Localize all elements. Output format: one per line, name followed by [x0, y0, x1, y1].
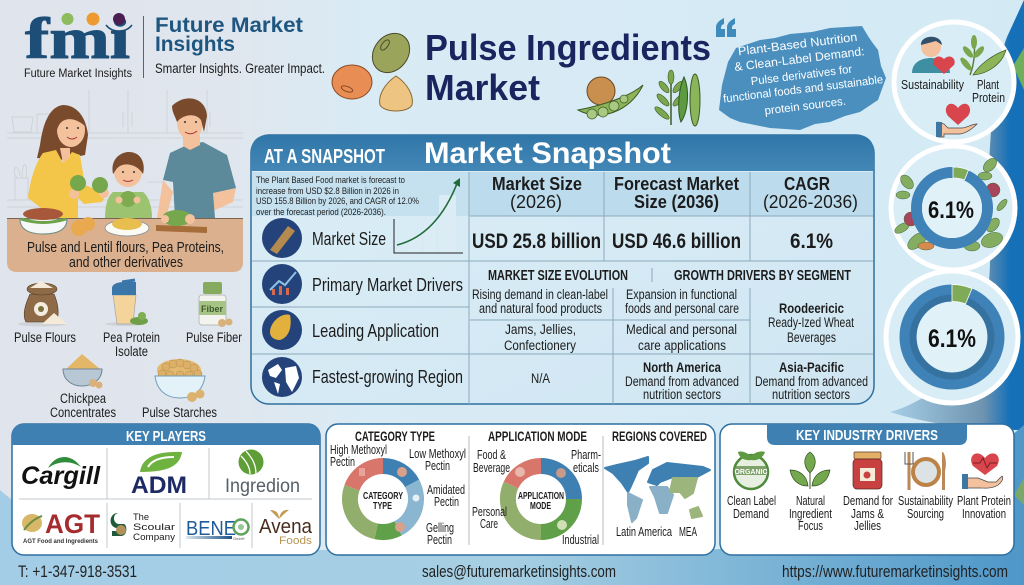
panel heading: KEY PLAYERS — [126, 429, 206, 445]
panel: key industry drivers — [720, 424, 1014, 555]
driver: sustainability sourcing — [898, 452, 953, 521]
circle: 6.1% donut with vegetables: 6.1% — [928, 197, 974, 224]
logo: Ingredion — [225, 450, 300, 497]
heading: application mode: APPLICATION MODE — [488, 429, 587, 444]
donut center: application mode: MODE — [530, 500, 551, 512]
logo: ADM: ADM — [131, 472, 187, 499]
illustration: family in kitchen: and other derivatives — [69, 255, 183, 271]
table cells: North America — [643, 360, 721, 375]
donut center: application mode — [518, 490, 564, 512]
panel heading: KEY INDUSTRY DRIVERS — [796, 428, 938, 444]
callout: plant-based nutrition: Plant-Based Nutrition — [737, 30, 858, 58]
column headings: Size (2036) — [634, 192, 719, 212]
icon: pod and plant — [578, 70, 700, 126]
summary text: over the forecast period (2026-2036). — [256, 207, 386, 217]
circle: 6.1% donut: 6.1% — [928, 325, 976, 353]
logo: The Scoular Company — [111, 512, 175, 542]
circle: sustainability and plant protein: Plant — [977, 78, 999, 92]
logo: Avena Foods: Foods — [279, 535, 313, 547]
category labels: Gelling — [426, 521, 454, 535]
application labels: eticals — [573, 461, 599, 475]
callout: plant-based nutrition — [717, 26, 886, 130]
category labels: Low Methoxyl — [409, 447, 466, 461]
driver: plant protein innovation: Innovation — [962, 506, 1006, 521]
heading: category type: CATEGORY TYPE — [355, 429, 435, 444]
table cells: Confectionery — [504, 338, 576, 353]
growth chart — [394, 178, 463, 253]
driver: clean label demand: Clean Label — [727, 493, 776, 508]
logo: Cargill: Cargill — [21, 462, 101, 490]
sub heading: growth drivers: GROWTH DRIVERS BY SEGMENT — [674, 268, 851, 284]
ingredient: pulse fiber: Pulse Fiber — [186, 330, 242, 345]
row icon: drivers — [262, 264, 302, 304]
title: Pulse Ingredients — [425, 27, 711, 68]
driver: natural ingredient focus: Natural — [796, 493, 825, 508]
sub heading: market size evolution: MARKET SIZE EVOLUTION — [488, 268, 628, 284]
panel header: Market Snapshot — [424, 137, 671, 170]
logo: BENEO: GmbH — [233, 536, 245, 541]
donut center: category type: TYPE — [373, 500, 392, 512]
market size value: USD 25.8 billion — [472, 229, 601, 253]
title: Market — [425, 67, 540, 108]
table cells: care applications — [638, 338, 726, 353]
table — [7, 218, 243, 272]
driver: demand for jams and jellies: Demand for — [843, 493, 893, 508]
application labels: Beverage — [473, 461, 510, 475]
logo: Avena Foods — [259, 510, 313, 547]
ingredient: pulse fiber: Fiber — [201, 304, 223, 314]
column headings: Forecast Market — [614, 174, 739, 194]
title — [425, 27, 711, 108]
logo: Future Market Insights: Future Market — [155, 13, 303, 37]
category labels: High Methoxyl — [330, 443, 387, 457]
table cells: Expansion in functional — [626, 287, 737, 302]
ingredient: pea protein isolate — [103, 280, 160, 359]
logo: BENEO: BENE — [186, 518, 236, 540]
illustration: family in kitchen — [7, 90, 243, 272]
food on table — [20, 208, 207, 236]
driver: natural ingredient focus: Ingredient — [789, 506, 832, 521]
table cells: nutrition sectors — [772, 387, 850, 402]
category labels: Amidated — [427, 483, 465, 497]
footer contacts: T: +1-347-918-3531 — [18, 562, 137, 581]
logo: Future Market Insights — [24, 6, 325, 80]
panel: key players — [12, 424, 320, 555]
row label: market size: Market Size — [312, 228, 386, 249]
application labels: Food & — [477, 448, 506, 462]
icon: whole beans — [332, 26, 417, 111]
table cells: and natural food products — [479, 301, 602, 316]
table cells: N/A — [531, 371, 550, 386]
callout: plant-based nutrition: protein sources. — [764, 96, 847, 118]
logo: The Scoular Company: Scoular — [133, 522, 175, 532]
driver: natural ingredient focus: Focus — [798, 518, 823, 533]
category labels — [330, 443, 466, 547]
row label: drivers: Primary Market Drivers — [312, 274, 463, 295]
ingredient: pulse flours: Pulse Flours — [14, 330, 76, 345]
table cells: Demand from advanced — [755, 374, 868, 389]
driver: sustainability sourcing: Sourcing — [907, 506, 944, 521]
circle: sustainability and plant protein: Protein — [972, 91, 1005, 105]
donut: category type — [350, 466, 420, 532]
logo: AGT: AGT Food and Ingredients — [23, 539, 99, 545]
table cells: Roodeericic — [779, 301, 844, 316]
driver: sustainability sourcing: Sustainability — [898, 493, 953, 508]
logo: Avena Foods: Avena — [259, 516, 313, 538]
panel header — [251, 135, 874, 171]
table cells: Demand from advanced — [625, 374, 739, 389]
circle: sustainability and plant protein: Sustainability — [901, 78, 965, 92]
table cells: Medical and personal — [626, 322, 737, 337]
quote mark — [716, 18, 736, 37]
table cells: Rising demand in clean-label — [472, 287, 608, 302]
column headings: (2026-2036) — [763, 192, 858, 212]
category labels: Pectin — [427, 533, 452, 547]
panel header: AT A SNAPSHOT — [264, 146, 385, 168]
callout: plant-based nutrition: Pulse derivatives for — [750, 64, 853, 88]
application labels: Personal — [472, 505, 507, 519]
panel: categories — [326, 424, 715, 555]
logo: The Scoular Company: Company — [133, 532, 175, 542]
icon: wheat plant — [959, 35, 1006, 75]
driver: natural ingredient focus — [789, 452, 832, 533]
circle: 6.1% donut with vegetables — [891, 146, 1015, 270]
application labels: Pharm- — [571, 448, 601, 462]
column headings — [492, 174, 858, 212]
icon: heart in hand — [936, 104, 977, 137]
cagr value: 6.1% — [790, 229, 833, 253]
logo: AGT: AGT — [45, 509, 100, 539]
logo: Future Market Insights: Smarter Insights. Greater Impact. — [155, 61, 325, 76]
table cells: Ready-Ized Wheat — [768, 315, 854, 330]
row label: application: Leading Application — [312, 320, 439, 341]
circle: 6.1% donut — [886, 271, 1018, 403]
panel heading — [12, 424, 320, 445]
driver: demand for jams and jellies: Jams & — [851, 506, 884, 521]
heading: regions covered: REGIONS COVERED — [612, 429, 707, 444]
donut center: application mode: APPLICATION — [518, 490, 564, 502]
table cells: Jams, Jellies, — [505, 322, 576, 337]
category labels: Pectin — [330, 455, 355, 469]
caption: Pulse and Lentil flours, Pea Proteins, — [27, 240, 224, 256]
footer contacts — [18, 562, 1008, 581]
circle: sustainability and plant protein — [894, 22, 1014, 142]
donut center: category type — [363, 490, 403, 512]
callout: plant-based nutrition: functional foods and sustainable — [723, 74, 884, 106]
table cells: foods and personal care — [625, 301, 739, 316]
row icon: market size — [262, 218, 302, 258]
category labels: Pectin — [425, 459, 450, 473]
ingredient: pea protein isolate: Isolate — [115, 344, 148, 359]
ingredient: pulse flours — [14, 281, 76, 345]
donut: application mode — [508, 466, 574, 532]
column headings: (2026) — [510, 192, 562, 212]
ingredient: pea protein isolate: Pea Protein — [103, 330, 160, 345]
logo: The Scoular Company: The — [133, 512, 149, 522]
donut chart — [908, 284, 996, 381]
logo: Future Market Insights: Future Market Insights — [24, 68, 132, 80]
logo: Future Market Insights: Insights — [155, 32, 235, 56]
driver: clean label demand: ORGANIC — [734, 469, 768, 476]
footer contacts: sales@futuremarketinsights.com — [422, 562, 616, 581]
ingredient: pulse fiber — [186, 282, 242, 345]
category labels: Pectin — [434, 495, 459, 509]
panel: market snapshot — [251, 135, 874, 404]
world map — [605, 457, 710, 539]
vegetable wreath — [893, 156, 1009, 253]
application labels: Care — [480, 517, 498, 531]
donut center: category type: CATEGORY — [363, 490, 403, 502]
forecast value: USD 46.6 billion — [612, 229, 741, 253]
table cells: Asia-Pacific — [779, 360, 844, 375]
driver: clean label demand — [727, 451, 776, 521]
fmi monogram: fmi — [25, 6, 130, 71]
table cells: Beverages — [787, 330, 836, 345]
row label: region: Fastest-growing Region — [312, 366, 463, 387]
woman — [28, 105, 109, 218]
donut chart — [916, 167, 988, 244]
world map: Latin America — [616, 525, 672, 539]
ingredient: pulse starches: Pulse Starches — [142, 405, 217, 420]
man — [157, 98, 236, 222]
summary text — [256, 175, 419, 217]
driver: demand for jams and jellies — [843, 452, 893, 533]
driver: clean label demand: Demand — [733, 506, 769, 521]
logo: Ingredion: Ingredion — [225, 476, 300, 497]
ingredient: chickpea concentrates: Chickpea — [60, 391, 106, 406]
logo: AGT — [22, 509, 100, 545]
boy — [105, 152, 152, 218]
driver: demand for jams and jellies: Jellies — [854, 518, 881, 533]
summary text: USD 155.8 Billion by 2026, and CAGR of 12.0% — [256, 196, 419, 206]
driver: plant protein innovation — [957, 453, 1011, 521]
ingredient: pulse starches — [142, 359, 217, 420]
world map: MEA — [679, 525, 697, 539]
column headings: Market Size — [492, 174, 582, 194]
ingredient: chickpea concentrates: Concentrates — [50, 405, 116, 420]
panel heading — [767, 424, 967, 445]
application labels — [472, 448, 601, 547]
summary text: The Plant Based Food market is forecast to — [256, 175, 405, 185]
application labels: Industrial — [562, 533, 599, 547]
row icon: region globe — [262, 357, 302, 397]
logo: ADM — [131, 452, 187, 499]
column headings: CAGR — [784, 174, 830, 194]
row icon: application — [262, 310, 302, 350]
icon: person with heart — [912, 37, 955, 74]
summary text: increase from USD $2.8 Billion in 2026 in — [256, 186, 399, 196]
table cells: nutrition sectors — [643, 387, 721, 402]
table cells — [472, 287, 868, 402]
callout: plant-based nutrition: & Clean-Label Demand: — [734, 44, 865, 74]
ingredient: chickpea concentrates — [50, 354, 116, 420]
